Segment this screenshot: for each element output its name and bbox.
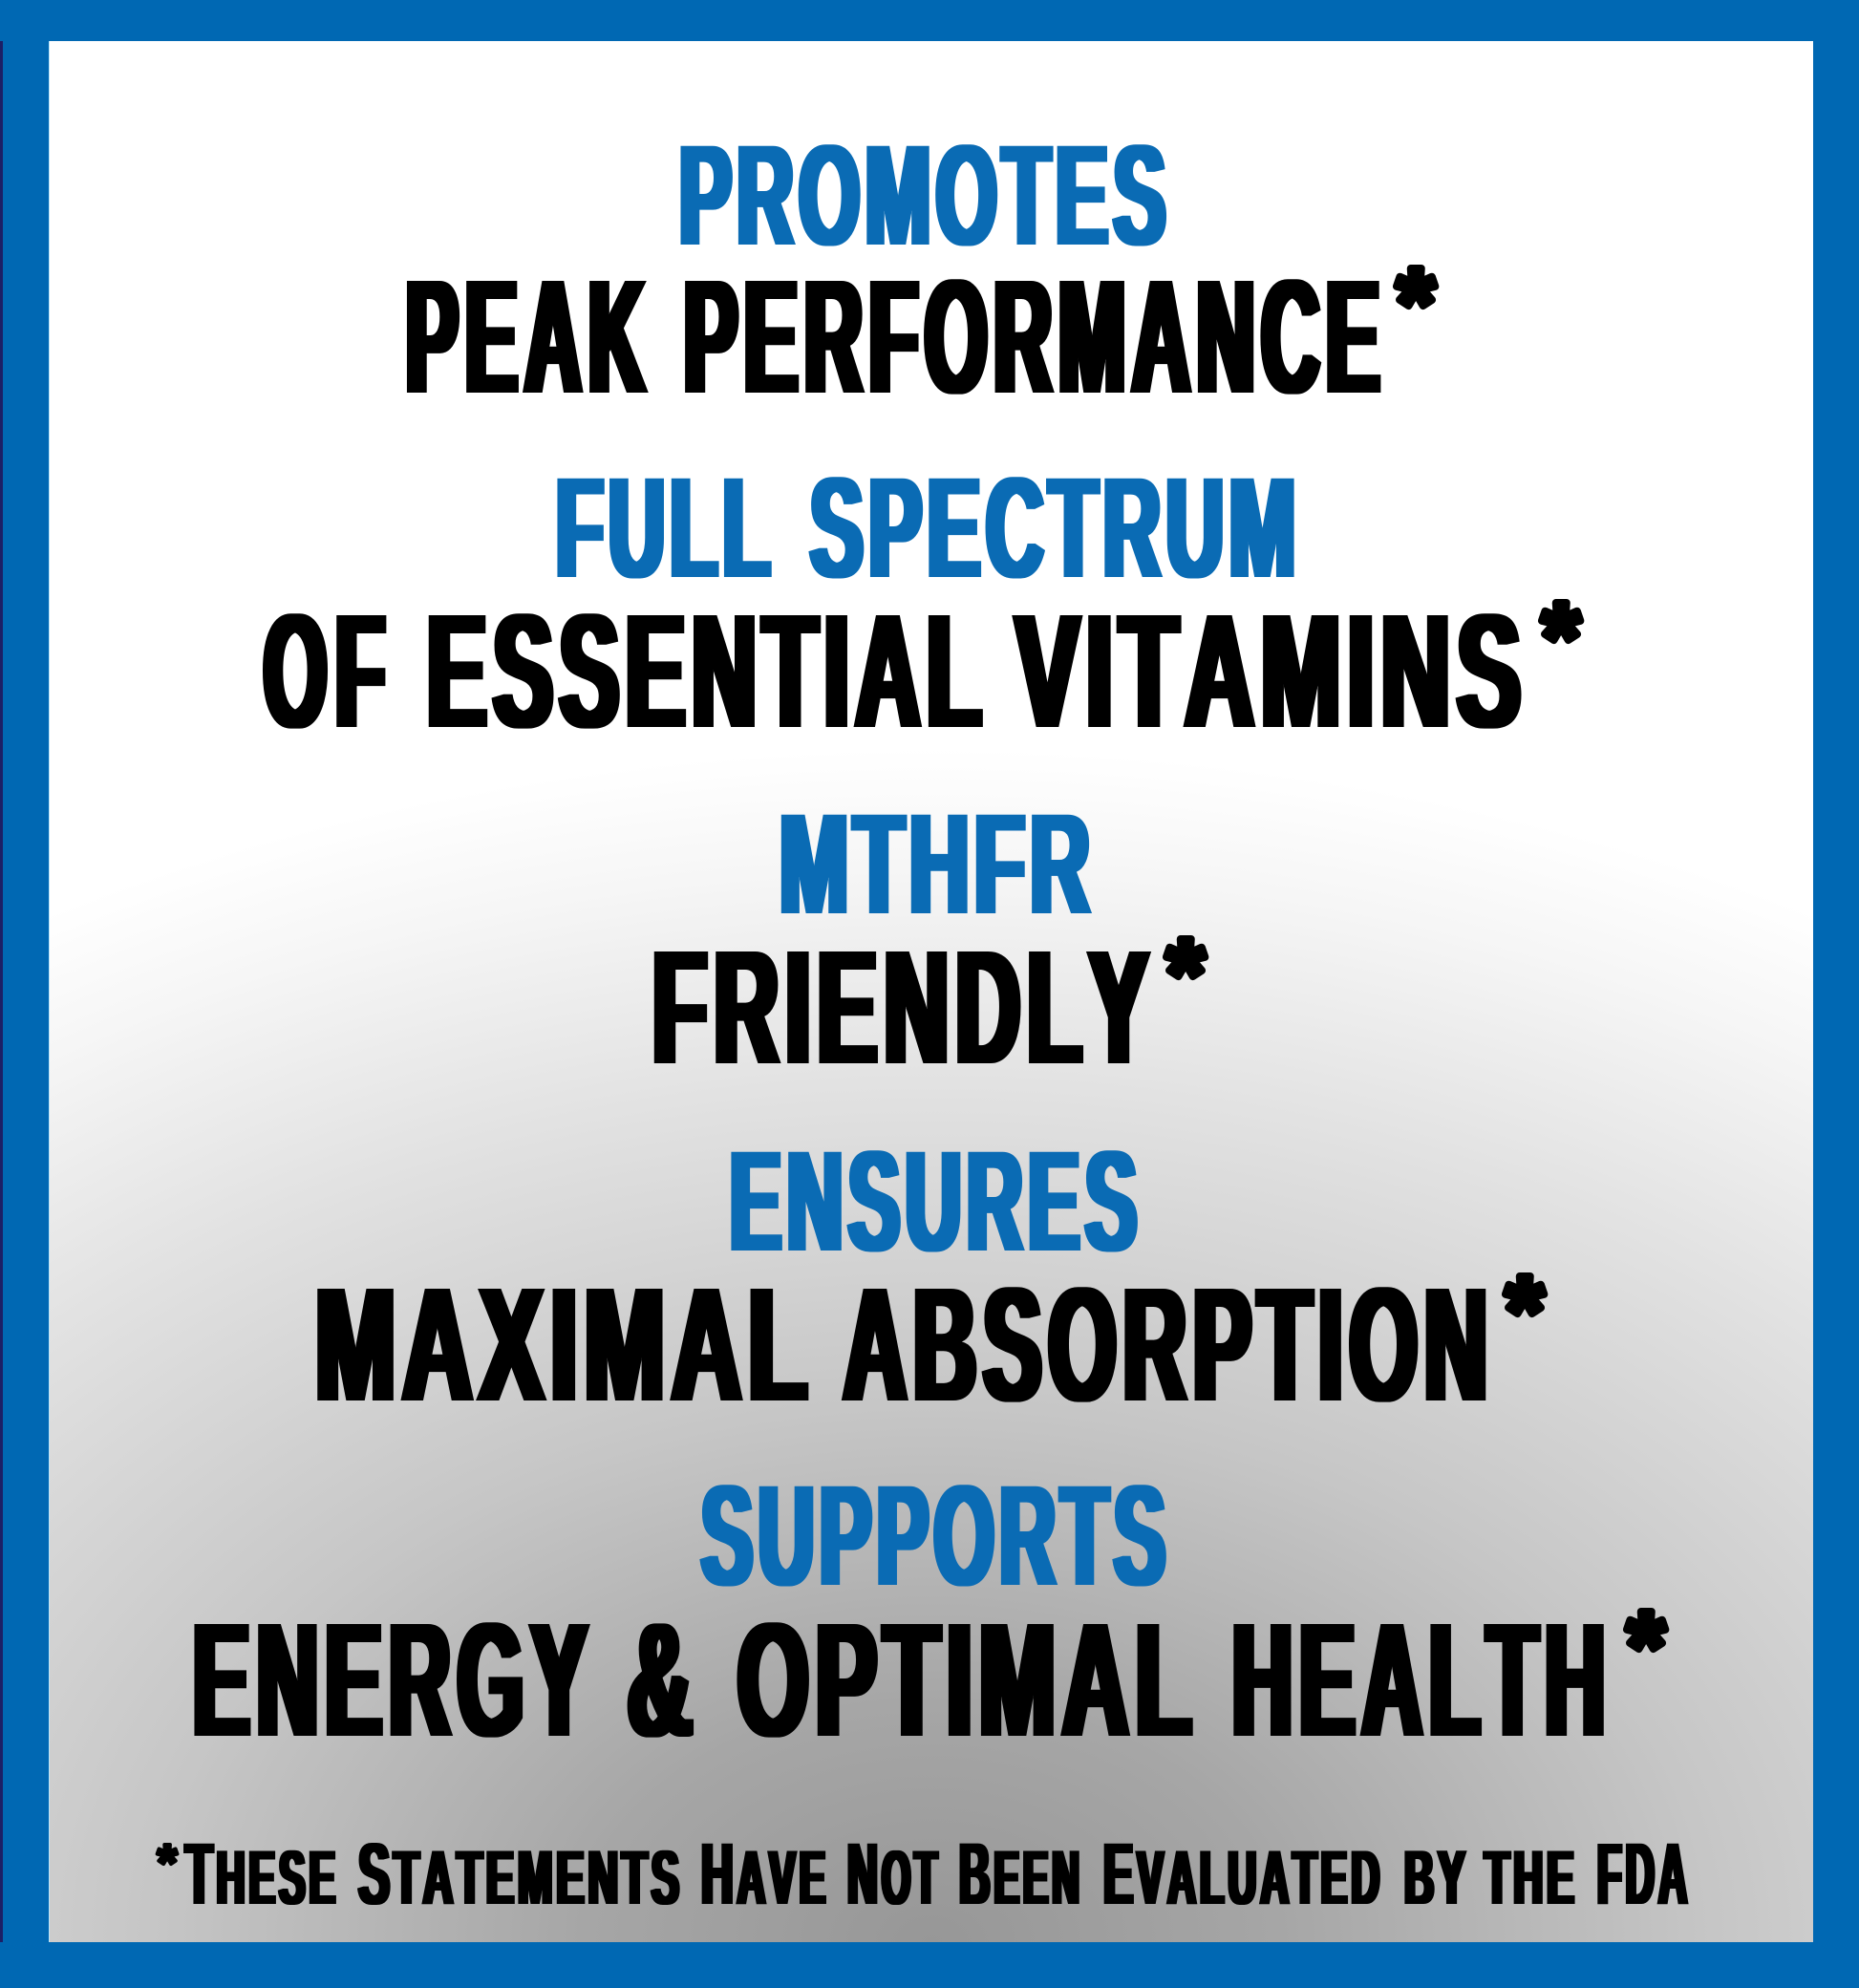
claim: supports energy and optimal health: HEALTH [1232,1589,1605,1771]
fda disclaimer: THE [1485,1833,1574,1920]
fda disclaimer [157,1825,1687,1924]
claim: full spectrum of essential vitamins: ESSENTIAL [427,582,981,762]
claim: mthfr friendly: FRIENDLY [652,918,1148,1099]
fda disclaimer: NOT [847,1826,937,1923]
claim: promotes peak performance: PROMOTES [679,116,1165,275]
claim: mthfr friendly: * [1166,918,1206,1030]
fda disclaimer: * [157,1834,178,1892]
fda disclaimer: HAVE [701,1826,825,1923]
claim: mthfr friendly: MTHFR [780,783,1090,944]
claim: promotes peak performance: PERFORMANCE [684,247,1379,428]
fda disclaimer: BY [1404,1833,1465,1920]
claim: promotes peak performance [406,116,1436,428]
claim: ensures maximal absorption: ENSURES [730,1121,1137,1281]
claim: promotes peak performance: * [1397,247,1436,359]
claim: supports energy and optimal health: * [1627,1591,1666,1702]
claim: supports energy and optimal health [193,1455,1666,1771]
claim: full spectrum of essential vitamins: * [1542,582,1581,694]
claim: full spectrum of essential vitamins: VITAMINS [1015,580,1521,762]
fda disclaimer: FDA [1597,1826,1687,1924]
claim: mthfr friendly [652,783,1206,1099]
claim: ensures maximal absorption: * [1506,1255,1545,1367]
dark left edge strip [0,41,3,1942]
fda disclaimer: THESE [185,1826,335,1923]
claim: promotes peak performance: PEAK [406,246,645,428]
claim: full spectrum of essential vitamins: FULL [556,448,770,608]
claim: ensures maximal absorption [315,1121,1545,1435]
claim: supports energy and optimal health: ENERGY [193,1589,588,1770]
claim: full spectrum of essential vitamins: OF [264,581,385,762]
claim: full spectrum of essential vitamins: SPECTRUM [810,447,1295,608]
claim: supports energy and optimal health: SUPPORTS [701,1455,1165,1615]
fda disclaimer: STATEMENTS [358,1825,679,1923]
fda disclaimer: EVALUATED [1103,1826,1379,1923]
claim: full spectrum of essential vitamins [264,447,1581,762]
fda disclaimer: BEEN [959,1825,1079,1923]
claim: supports energy and optimal health: & [628,1591,693,1771]
claim: supports energy and optimal health: OPTIMAL [737,1590,1191,1771]
claim: ensures maximal absorption: MAXIMAL [315,1253,807,1435]
claim: ensures maximal absorption: ABSORPTION [844,1253,1487,1435]
